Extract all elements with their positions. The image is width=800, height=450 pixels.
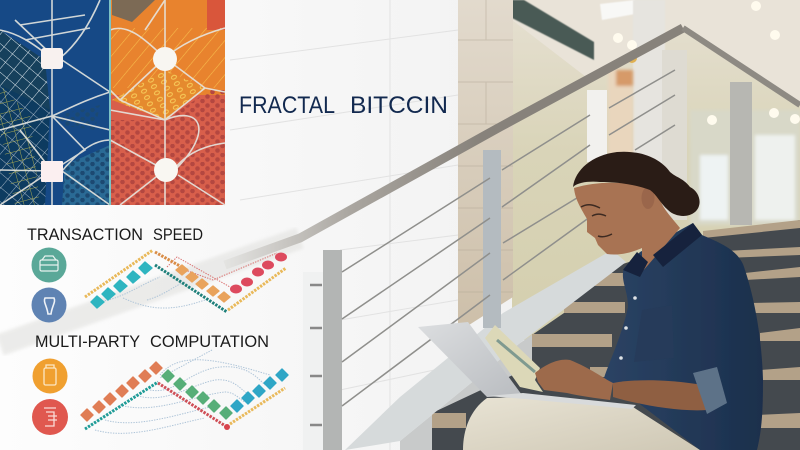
ceiling lights [613, 1, 800, 125]
icon: red document stack [32, 399, 68, 435]
blue half [0, 0, 110, 205]
shirt buttons and pocket [619, 296, 674, 362]
skylight [600, 0, 635, 20]
heading: transaction speed: TRANSACTION [27, 225, 143, 244]
collar [623, 223, 702, 277]
heading: transaction speed [27, 225, 203, 244]
white network lines [0, 0, 225, 205]
red blobs [230, 252, 287, 294]
railing posts and cables [303, 50, 752, 450]
hair [573, 152, 700, 216]
icon: orange clipboard [32, 358, 68, 394]
laptop [418, 322, 636, 409]
ear [642, 187, 654, 209]
trousers [463, 397, 700, 450]
white column [633, 0, 665, 182]
staircase [432, 220, 800, 450]
chart: transaction speed network [85, 250, 287, 312]
red junction node [224, 424, 230, 430]
heading: multi-party computation: MULTI-PARTY [35, 332, 140, 351]
hand [535, 360, 613, 400]
title: FRACTAL [239, 92, 335, 119]
shirt [604, 223, 763, 450]
orange squares [176, 265, 230, 302]
glass panels on the right [608, 70, 800, 225]
stainless handrail [0, 28, 800, 345]
textures [110, 28, 225, 88]
glass base rail [345, 250, 626, 450]
ceiling [512, 0, 800, 105]
background wall beyond the pillar [512, 0, 800, 340]
connecting dotted curves [97, 253, 277, 308]
icon: teal machine [32, 248, 66, 282]
chart: multi-party computation network [81, 350, 288, 433]
panel: fractal artwork [0, 0, 225, 205]
facial features [581, 205, 612, 237]
connecting dotted curves [95, 350, 270, 433]
wall brick lines [230, 0, 458, 450]
dotted bars [85, 250, 286, 312]
dark wall sign [512, 0, 594, 60]
teal divider [109, 0, 111, 205]
heading: transaction speed: SPEED [153, 225, 203, 244]
stair treads [432, 220, 800, 428]
wedge under the glass rail [400, 335, 532, 450]
orange squares [81, 362, 162, 421]
node: square bottom [41, 161, 63, 182]
orange and red half [110, 0, 225, 205]
forearm [613, 380, 713, 410]
rolled sleeve [693, 367, 727, 414]
blue squares [231, 369, 288, 412]
icon: blue light bulb [32, 288, 66, 322]
newspaper [485, 325, 543, 392]
node: circle bottom [154, 158, 178, 182]
title: BITCCIN [350, 92, 448, 119]
title [239, 92, 448, 119]
node: square top [41, 48, 63, 69]
green squares [162, 370, 232, 419]
man working on laptop [418, 152, 763, 450]
neck and face [574, 183, 680, 272]
heading: multi-party computation [35, 332, 269, 351]
dotted bars [85, 382, 285, 429]
teal squares [91, 262, 152, 308]
beige pillar [458, 0, 513, 332]
node: circle top [153, 47, 177, 71]
heading: multi-party computation: COMPUTATION [150, 332, 269, 351]
